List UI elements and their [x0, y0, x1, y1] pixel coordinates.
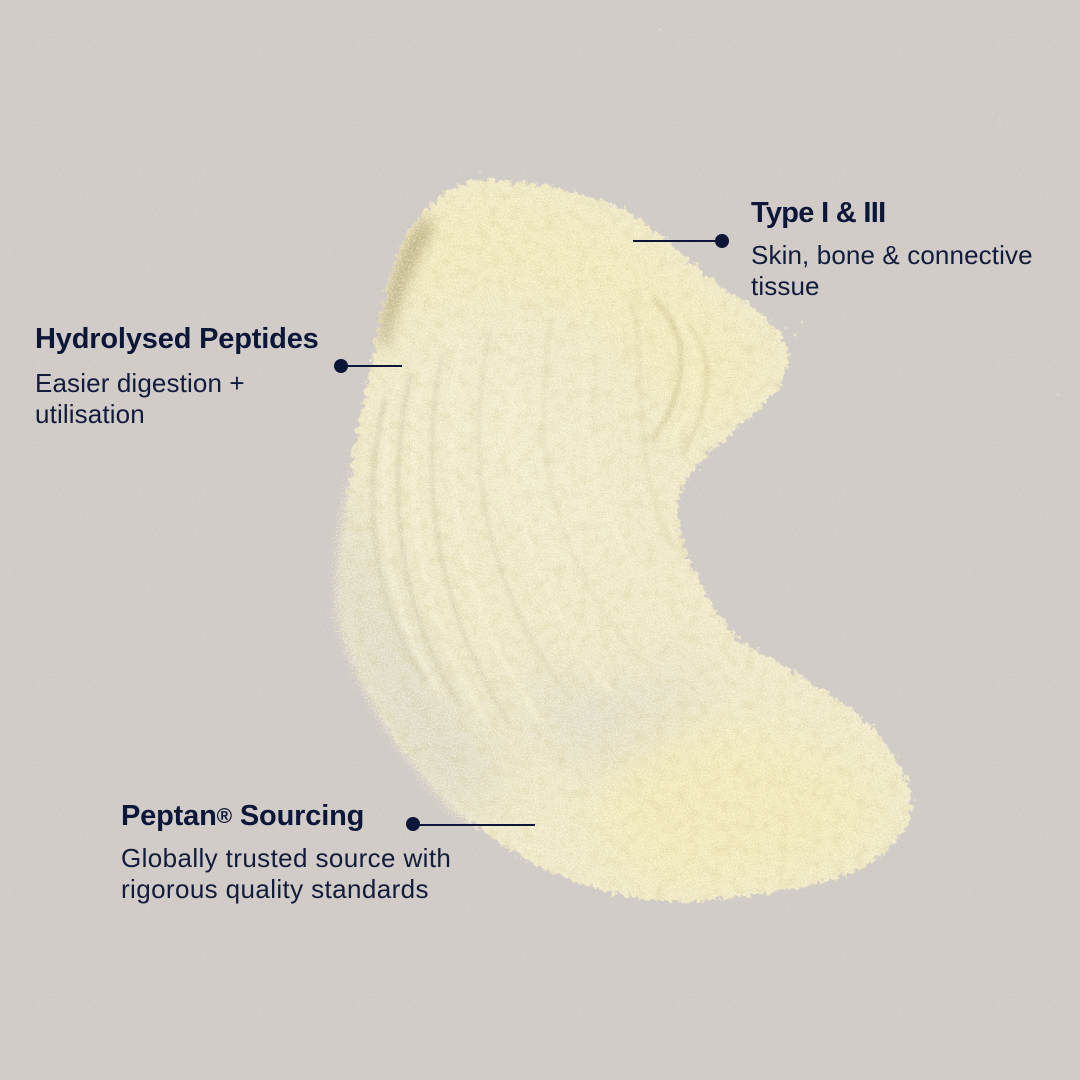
- text block: Easier digestion +: [35, 368, 245, 398]
- text block: Peptan® Sourcing: [121, 800, 364, 832]
- leader line with dot: [334, 359, 402, 373]
- curved brush ridges: [372, 300, 707, 725]
- tonal shading: [315, 192, 890, 890]
- dark shaded rim: [378, 215, 434, 350]
- leader line with dot: [406, 817, 535, 831]
- text block: [121, 800, 451, 904]
- text block: utilisation: [35, 399, 145, 429]
- text block: rigorous quality standards: [121, 874, 429, 904]
- leader line with dot: [633, 234, 729, 248]
- text block: tissue: [751, 271, 820, 301]
- scattered stray grains: [479, 29, 1059, 801]
- text block: Skin, bone & connective: [751, 240, 1033, 270]
- callout: Type I & III: [633, 197, 1033, 301]
- text block: Hydrolysed Peptides: [35, 323, 319, 355]
- callout: Hydrolysed Peptides: [35, 323, 402, 429]
- powder clumps and grain: [328, 182, 908, 902]
- text block: Type I & III: [751, 197, 885, 229]
- text block: [35, 323, 319, 429]
- callout: Peptan Sourcing: [121, 800, 535, 904]
- powder shape: [328, 177, 914, 905]
- text block: Globally trusted source with: [121, 843, 451, 873]
- text block: [751, 197, 1033, 301]
